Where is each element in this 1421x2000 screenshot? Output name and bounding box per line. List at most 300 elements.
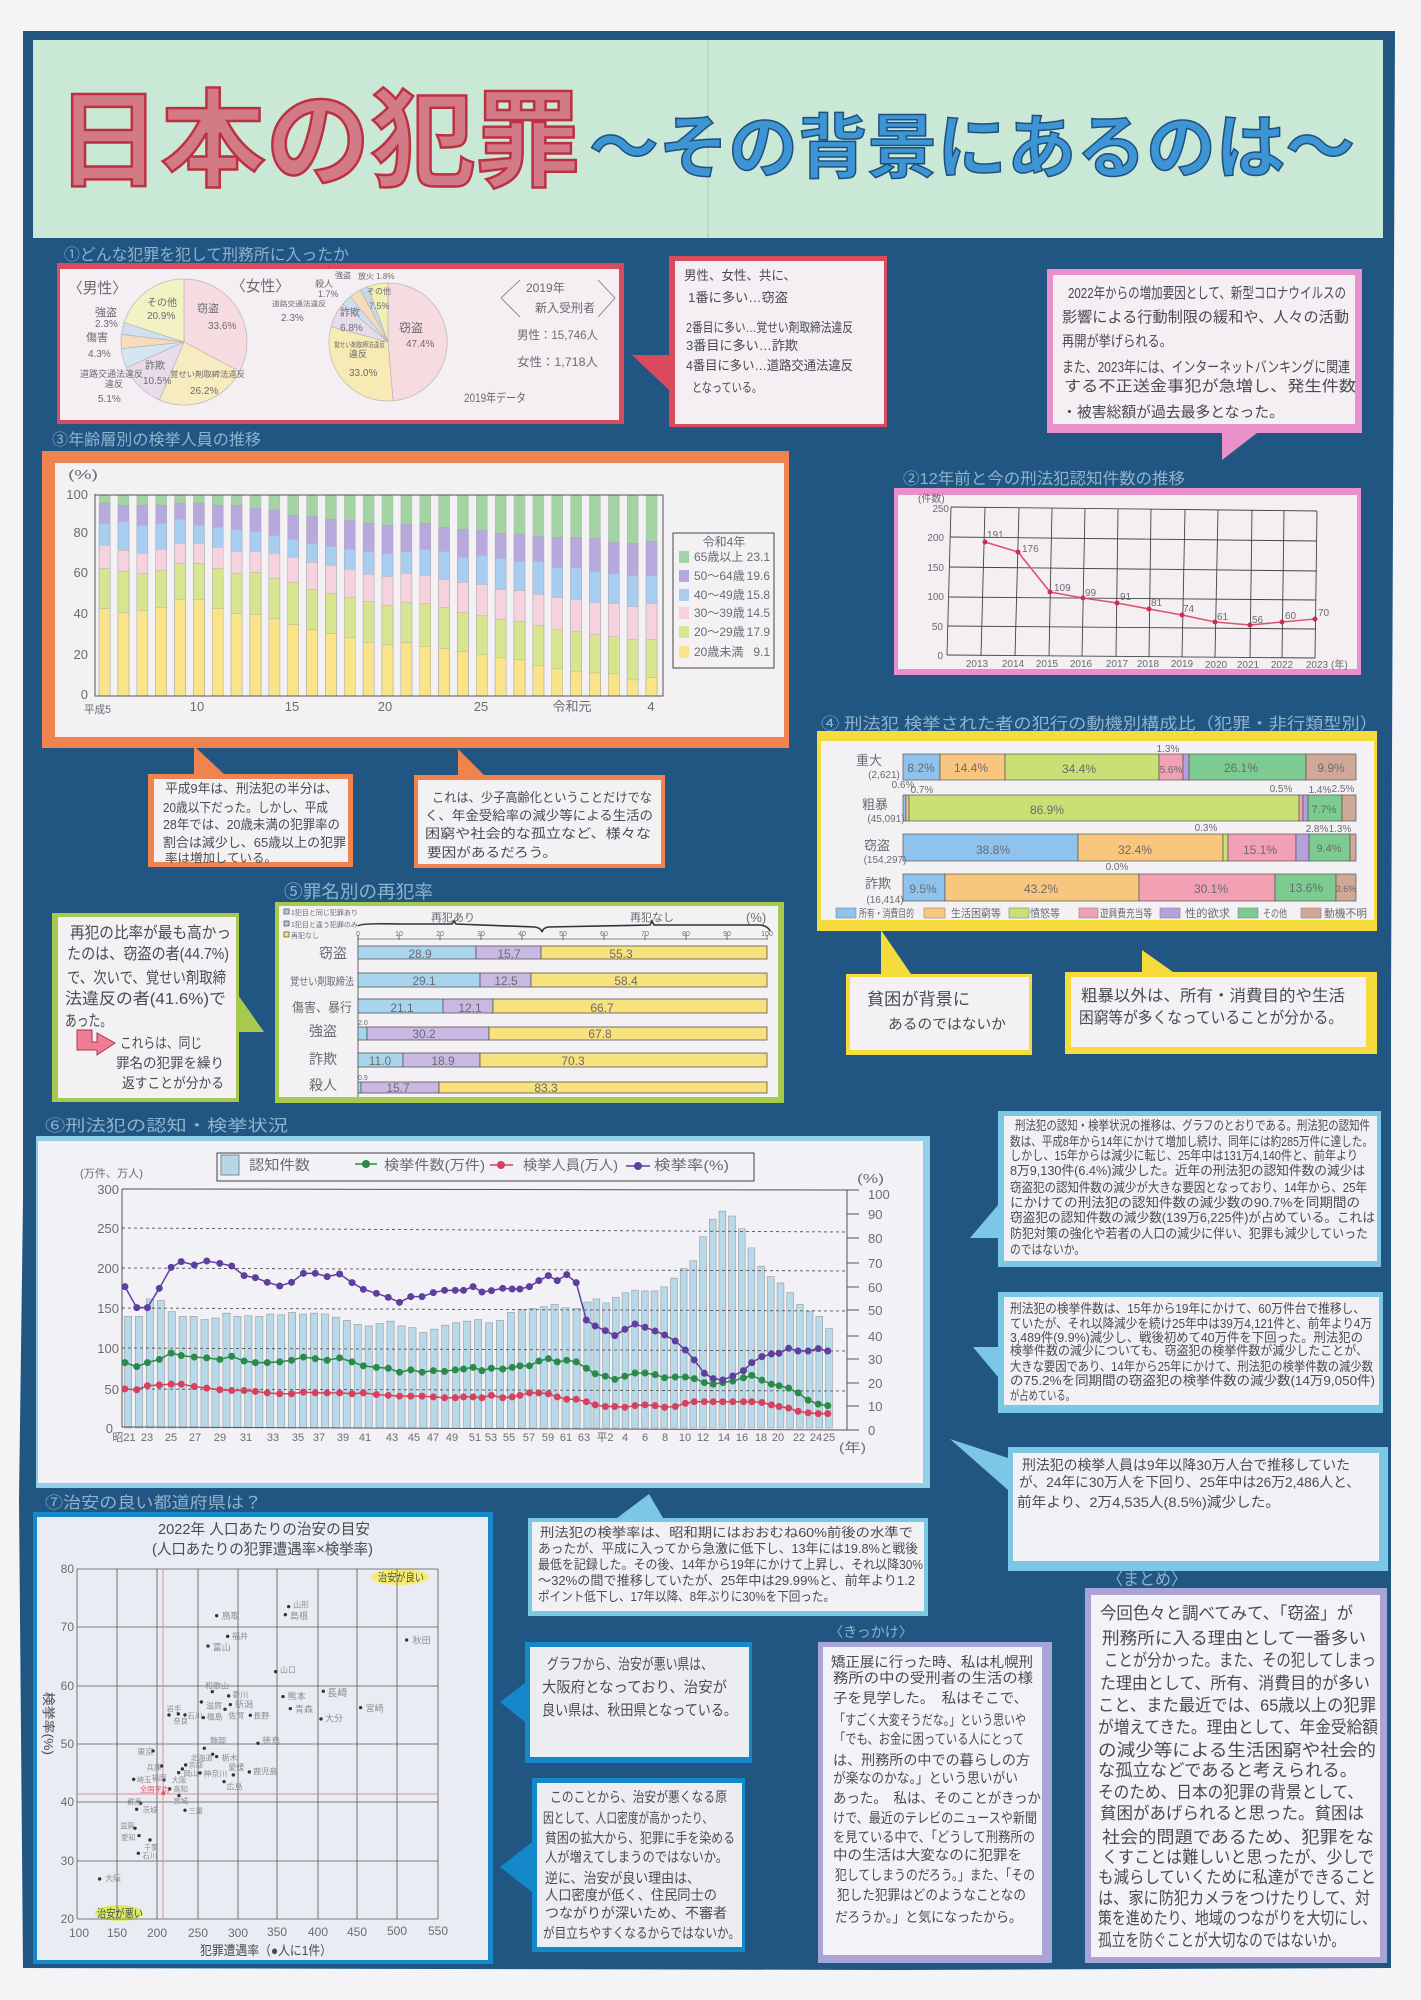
pie labels: 26.2% — [190, 386, 218, 397]
callout: 20s share: 28年では、20歳未満の犯罪率の — [163, 817, 340, 832]
axis labels: 80 — [868, 1231, 882, 1246]
panel: motivation — [818, 1624, 1052, 1963]
heading 2: ②12年前と今の刑法犯認知件数の推移 — [903, 470, 1185, 488]
heading 6: ⑥刑法犯の認知・検挙状況 — [45, 1117, 288, 1135]
inmate numbers — [464, 280, 615, 405]
row labels: 粗暴 — [862, 797, 888, 812]
pie labels: 2.3% — [95, 319, 118, 330]
bar value labels: 34.4% — [1062, 762, 1096, 776]
inmate numbers: 2019年データ — [464, 390, 526, 405]
prefecture points: 滋賀 — [120, 1821, 135, 1830]
brace and axis: 0 — [356, 931, 360, 938]
combo chart: 39 — [337, 1432, 349, 1444]
small segment labels: 1.3% — [1157, 744, 1180, 755]
legend: age groups: 40〜49歳 — [694, 588, 745, 602]
note: worst and best prefecture: グラフから、治安が悪い県は、 — [547, 1656, 713, 1673]
legend: motives: 所有・消費目的 — [859, 906, 914, 920]
small segment labels: 1.4% — [1309, 785, 1332, 796]
legend: age groups: 14.5 — [747, 606, 770, 620]
pie labels: 6.8% — [340, 323, 363, 334]
legend: reoffence type: 1犯目と違う犯罪のみ — [291, 920, 358, 929]
prefecture points: 長野 — [253, 1711, 269, 1720]
stacked bar chart: 20 — [378, 699, 392, 714]
combo chart: 24 — [810, 1432, 822, 1444]
line chart: 2021 — [1237, 660, 1260, 671]
heading: kikkake: 〈きっかけ〉 — [829, 1624, 913, 1640]
brace and axis: 80 — [682, 931, 690, 938]
highlight labels — [97, 1570, 424, 1920]
panel: summary: ことが分かった。また、その犯してしまっ — [1104, 1651, 1376, 1670]
bar value labels: 14.4% — [954, 761, 988, 775]
line chart: 56 — [1252, 615, 1264, 626]
brace and axis: 90 — [723, 931, 731, 938]
axis labels: 90 — [868, 1207, 882, 1222]
prefecture points: 兵庫 — [147, 1763, 161, 1772]
bar values: 29.1 — [412, 974, 436, 988]
legend: reoffence type: 再犯なし — [291, 931, 319, 940]
combo chart: 12 — [697, 1432, 709, 1444]
combo chart: 31 — [240, 1432, 252, 1444]
combo chart: 51 — [469, 1432, 481, 1444]
line chart: 0 — [937, 651, 943, 662]
axis labels: 50 — [868, 1303, 882, 1318]
brace and axis: 50 — [559, 931, 567, 938]
axis labels: 70 — [61, 1620, 74, 1634]
stacked bar chart: 40 — [74, 606, 88, 621]
axis labels: 30 — [868, 1352, 882, 1367]
legend: motives — [836, 906, 1367, 920]
y axis title: 検挙率(%) — [41, 1692, 56, 1755]
combo chart: 27 — [189, 1432, 201, 1444]
panel: motivation: 矯正展に行った時、私は札幌刑 — [831, 1654, 1033, 1670]
prefecture points: 鹿児島 — [253, 1766, 277, 1776]
bar value labels: 32.4% — [1118, 843, 1152, 857]
bar values: 70.3 — [561, 1054, 585, 1068]
bar value labels: 9.4% — [1316, 843, 1342, 855]
stacked bar chart — [66, 467, 663, 716]
callout: 2022 increase factors: また、2023年には、インターネットバンキングに関連 — [1062, 359, 1350, 376]
note: recognised cases: 防犯対策の強化や若者の人口の減少に伴い、犯罪も減少していった — [1010, 1226, 1368, 1241]
combo chart: 8 — [662, 1432, 668, 1444]
legend: motives: 憤怒等 — [1030, 906, 1060, 920]
axis labels: 350 — [267, 1925, 287, 1939]
pie labels: 道路交通法違反 — [80, 368, 143, 379]
callout: 2022 increase factors: する不正送金事犯が急増し、発生件数 — [1064, 378, 1356, 395]
prefecture points: 長崎 — [327, 1687, 347, 1700]
bar values: 28.9 — [408, 947, 432, 961]
brace and axis: 40 — [518, 931, 526, 938]
panel: summary — [1085, 1570, 1387, 1963]
note: recognised cases: しかし、15年からは減少に転じ、25年中は131万4,140件と、前年より — [1010, 1148, 1358, 1163]
panel: summary: な孤立などであると考えられる。 — [1098, 1761, 1357, 1780]
callout: ageing background — [414, 749, 665, 868]
callout: except violent crime — [1065, 950, 1377, 1054]
prefecture points: 山口 — [280, 1666, 296, 1675]
line chart: 60 — [1285, 611, 1297, 622]
combo chart: 45 — [408, 1432, 420, 1444]
panel: motivation: あった。 私は、そのことがきっか — [833, 1790, 1041, 1806]
row labels: 覚せい剤取締法 — [290, 974, 354, 988]
note: cleared cases: 検挙件数の減少についても、窃盗犯の検挙件数が減少したことが、 — [1010, 1343, 1368, 1358]
prefecture points: 熊本 — [288, 1690, 306, 1701]
note: reasons for safety: 人口密度が低く、住民同士の — [545, 1887, 717, 1903]
highlight labels: 治安が良い — [378, 1570, 424, 1584]
row labels: 強盗 — [309, 1023, 337, 1039]
note: reasons for safety: が目立ちやすくなるからではないか。 — [543, 1925, 740, 1941]
callout: except violent crime: 粗暴以外は、所有・消費目的や生活 — [1081, 987, 1345, 1005]
callout: 20s share — [148, 746, 353, 867]
combo chart: 16 — [736, 1432, 748, 1444]
prefecture points: 福岡 — [152, 1774, 166, 1783]
inmate numbers: 2019年 — [526, 281, 565, 295]
pie labels: 33.0% — [349, 368, 377, 379]
axis labels: 10 — [868, 1399, 882, 1414]
bar values: 11.0 — [369, 1054, 392, 1068]
prefecture points: 高知 — [173, 1785, 188, 1794]
axis labels: 40 — [61, 1795, 74, 1809]
note: recognised cases: にかけての刑法犯の認知件数の減少数の90.7%を同期間の — [1010, 1195, 1360, 1210]
axis labels: 20 — [61, 1912, 74, 1926]
pie labels: 47.4% — [406, 339, 434, 350]
callout: 20s share: 20歳以下だった。しかし、平成 — [163, 800, 328, 815]
row labels: 窃盗 — [864, 838, 890, 853]
axis labels: 0 — [106, 1421, 113, 1436]
panel 7: public safety scatter plot — [33, 1494, 493, 1964]
note: cleared cases: が占めている。 — [1010, 1388, 1075, 1403]
pie labels: 〈男性〉 — [68, 280, 127, 297]
pie labels: 殺人 — [315, 278, 333, 289]
line chart: 2015 — [1036, 659, 1059, 670]
prefecture points: 広島 — [227, 1781, 243, 1791]
note: worst and best prefecture: 大阪府となっており、治安が — [542, 1679, 727, 1696]
small segment labels: 0.3% — [1195, 823, 1218, 834]
prefecture points: 徳島 — [262, 1735, 280, 1746]
panel 4: motives stacked bars — [817, 715, 1378, 931]
note: arrested persons — [950, 1439, 1388, 1571]
line chart: 81 — [1151, 598, 1163, 609]
bar value labels: 26.1% — [1224, 761, 1258, 775]
panel: summary: 今回色々と調べてみて、「窃盗」が — [1100, 1604, 1353, 1623]
axis labels: 300 — [228, 1926, 248, 1940]
bar value labels — [907, 761, 1356, 896]
pie labels — [68, 270, 434, 405]
prefecture points: 宮城 — [173, 1796, 189, 1805]
line chart: 2016 — [1070, 659, 1093, 670]
callout: repeat offending note: で、次いで、覚せい剤取締 — [67, 969, 226, 987]
callout: repeat offending note: たのは、窃盗の者(44.7%) — [67, 945, 229, 963]
axis labels — [80, 1167, 890, 1455]
callout: ageing background: 困窮や社会的な孤立など、様々な — [425, 826, 651, 841]
brace and axis: 60 — [600, 931, 608, 938]
legend: reoffence type: 1犯目と同じ犯罪あり — [291, 908, 358, 917]
pie labels: 詐欺 — [145, 359, 165, 372]
bar value labels: 15.1% — [1243, 843, 1277, 857]
bar values: 83.3 — [534, 1081, 558, 1095]
bar values: 58.4 — [614, 974, 638, 988]
legend: age groups: 9.1 — [753, 645, 770, 659]
axis labels: 200 — [97, 1261, 119, 1276]
combo chart: 47 — [427, 1432, 439, 1444]
note: cleared cases — [973, 1292, 1383, 1413]
prefecture points: 愛媛 — [228, 1762, 244, 1772]
combo chart: 14 — [718, 1432, 730, 1444]
row labels: 重大 — [856, 753, 882, 768]
prefecture points: 鳥取 — [222, 1610, 240, 1621]
callout: top crimes: 4番目に多い…道路交通法違反 — [686, 358, 853, 373]
combo chart: 53 — [485, 1432, 497, 1444]
prefecture points: 神奈川 — [203, 1769, 227, 1779]
stacked bar chart: 平成5 — [84, 703, 111, 716]
axis labels: (%) — [857, 1171, 884, 1186]
axis labels: 70 — [868, 1256, 882, 1271]
panel: summary: くすことは難しいと思ったが、少しで — [1102, 1848, 1374, 1867]
legend: age groups: 50〜64歳 — [694, 569, 745, 583]
panel 2: recognised cases line chart — [894, 470, 1361, 675]
bar values: 66.7 — [590, 1001, 614, 1015]
pie labels: その他 — [147, 296, 177, 309]
note: clearance rate — [528, 1494, 928, 1616]
row labels: (2,621) — [868, 770, 900, 781]
line: arrested cases — [125, 1353, 828, 1414]
callout: repeat offending note: 罪名の犯罪を繰り — [116, 1055, 224, 1071]
combo chart: 35 — [292, 1432, 304, 1444]
axis labels: 100 — [97, 1341, 119, 1356]
panel 5: reoffending rate by offence — [275, 882, 784, 1103]
note: clearance rate: 刑法犯の検挙率は、昭和期にはおおむね60%前後の水準で — [540, 1525, 913, 1540]
stacked bar chart: 15 — [285, 699, 299, 714]
prefecture points: 和歌山 — [205, 1681, 229, 1691]
pie labels: 〈女性〉 — [231, 278, 290, 295]
brace and axis: 再犯なし — [630, 911, 674, 924]
line chart: 2018 — [1137, 659, 1160, 670]
icon: pink arrow — [77, 1030, 115, 1055]
bar value labels: 5.6% — [1160, 765, 1183, 776]
line chart: 61 — [1217, 612, 1229, 623]
axis labels: 150 — [107, 1926, 127, 1940]
prefecture points: 滋賀 — [206, 1700, 222, 1710]
row: fraud — [903, 874, 1356, 901]
legend: age groups — [673, 533, 774, 668]
bar value labels: 3.6% — [1336, 884, 1356, 894]
legend: age groups: 令和4年 — [703, 535, 745, 549]
panel: motivation: 「でも、お金に困っている人にとって — [834, 1731, 1024, 1747]
bar values: 12.1 — [458, 1001, 482, 1015]
note: reasons for safety: 貧困の拡大から、犯罪に手を染める — [545, 1830, 735, 1846]
legend: series — [217, 1153, 754, 1181]
panel: motivation: は、刑務所の中での暮らしの方 — [833, 1752, 1030, 1768]
line chart: 100 — [927, 592, 944, 603]
panel 1: pie charts by offence — [57, 246, 624, 424]
legend: age groups: 20〜29歳 — [694, 625, 745, 639]
callout: repeat offending note: これらは、同じ — [120, 1035, 202, 1051]
axis labels: (年) — [839, 1440, 866, 1455]
legend: age groups: 20歳未満 — [694, 645, 743, 659]
x axis title: 犯罪遭遇率（●人に1件） — [200, 1943, 332, 1958]
bar values: 18.9 — [431, 1054, 455, 1068]
chart title — [152, 1521, 373, 1558]
note: clearance rate: あったが、平成に入ってから急激に低下し、13年には19.8%と戦後 — [538, 1541, 918, 1556]
axis labels: 60 — [868, 1280, 882, 1295]
note: reasons for safety: 逆に、治安が良い理由は、 — [545, 1870, 700, 1886]
inmate numbers: 男性：15,746人 — [517, 328, 598, 342]
pie labels: 窃盗 — [197, 301, 219, 315]
prefecture points: 島根 — [290, 1610, 308, 1621]
prefecture points: 岡山 — [183, 1769, 198, 1778]
callout: ageing background: 要因があるだろう。 — [427, 845, 557, 860]
prefecture points: 静岡 — [210, 1735, 226, 1745]
line chart: 150 — [927, 563, 944, 574]
prefecture points: 大分 — [325, 1713, 343, 1724]
prefecture points: 青森 — [295, 1703, 313, 1714]
row labels: 殺人 — [309, 1077, 337, 1093]
combo chart: 25 — [823, 1432, 835, 1444]
callout: repeat offending note: 返すことが分かる — [122, 1075, 224, 1091]
pie labels: 強盗 — [335, 270, 351, 280]
legend: motives: 遊興費充当等 — [1100, 906, 1152, 920]
line: clearance rate — [125, 1261, 828, 1380]
axis labels: 80 — [61, 1562, 74, 1576]
axis labels: (万件、万人) — [80, 1167, 143, 1180]
axis labels: 0 — [868, 1423, 875, 1438]
callout: repeat offending note: 法違反の者(41.6%)で — [65, 990, 226, 1008]
axis labels: 100 — [69, 1926, 89, 1940]
combo chart: 平2 — [596, 1432, 614, 1444]
callout: 2022 increase factors — [1047, 269, 1362, 460]
note: reasons for safety — [500, 1778, 745, 1952]
legend: series: 検挙件数(万件) — [384, 1157, 485, 1173]
note: cleared cases: の75.2%を同期間の窃盗犯の検挙件数の減少数(14万9,050件) — [1010, 1373, 1375, 1388]
panel: motivation: 中の生活は大変なのに犯罪を — [833, 1847, 1022, 1863]
brace and axis — [356, 910, 773, 1097]
prefecture points: 群馬 — [127, 1797, 142, 1806]
panel 6: recognised cases and arrests chart — [36, 1117, 930, 1488]
brace and axis: 30 — [477, 931, 485, 938]
brace and axis: (%) — [746, 910, 766, 925]
bar values: 55.3 — [609, 947, 633, 961]
small segment labels: 2.5% — [1332, 784, 1355, 795]
note: cleared cases: 刑法犯の検挙件数は、15年から19年にかけて、60万件台で推移し、 — [1010, 1301, 1365, 1316]
bar value labels: 9.5% — [909, 882, 937, 896]
stacked bar chart: (%) — [68, 467, 98, 482]
note: recognised cases: 8万9,130件(6.4%)減少した。近年の刑法犯の認知件数の減少は — [1010, 1163, 1365, 1178]
callout: 2022 increase factors: ・被害総額が過去最多となった。 — [1062, 403, 1284, 421]
prefecture points: 大阪 — [172, 1776, 187, 1785]
note: clearance rate: 〜32%の間で推移していたが、25年中は29.99%と、前年より1.2 — [538, 1573, 915, 1588]
row labels: 傷害、暴行 — [292, 1000, 352, 1015]
axis labels: 40 — [868, 1329, 882, 1344]
prefecture points — [100, 1601, 431, 1883]
legend: age groups: 23.1 — [747, 550, 770, 564]
note: cleared cases: 3,489件(9.9%)減少し、戦後初めて40万件を下回った。刑法犯の — [1010, 1330, 1363, 1345]
callout: top crimes — [632, 256, 887, 427]
line chart: 2013 — [966, 659, 989, 670]
line chart: 2023 — [1306, 660, 1329, 671]
chart title: 2022年 人口あたりの治安の目安 — [158, 1521, 370, 1538]
bar value labels: 13.6% — [1289, 881, 1323, 895]
stacked bar chart: 60 — [74, 565, 88, 580]
panel: motivation: が楽なのかな。」という思いがい — [833, 1770, 1018, 1786]
line chart: 250 — [932, 504, 949, 515]
line chart: 70 — [1318, 608, 1330, 619]
prefecture points: 全国平均 — [140, 1785, 169, 1794]
panel: motivation: 「すごく大変そうだな。」という思いや — [834, 1712, 1026, 1728]
heading 4: ④ 刑法犯 検挙された者の犯行の動機別構成比（犯罪・非行類型別） — [821, 715, 1378, 733]
pie labels: 覚せい剤取締法違反 — [334, 340, 385, 349]
line chart: 2022 — [1271, 660, 1294, 671]
note: clearance rate: 最低を記録した。その後、14年から19年にかけて上昇し、それ以降30% — [538, 1557, 923, 1572]
brace and axis: 10 — [395, 931, 403, 938]
combo chart: 37 — [313, 1432, 325, 1444]
highlight ellipses — [371, 1569, 429, 1585]
legend: series: 検挙人員(万人) — [523, 1157, 618, 1173]
small segment labels: 1.3% — [1329, 824, 1352, 835]
stacked bar chart: 10 — [190, 699, 204, 714]
axis labels: 250 — [97, 1221, 119, 1236]
brace and axis: 70 — [641, 931, 649, 938]
line chart: 2020 — [1205, 660, 1228, 671]
callout: repeat offending note: 再犯の比率が最も高かっ — [70, 924, 231, 942]
prefecture points: 岩手 — [167, 1705, 181, 1714]
combo chart: 55 — [503, 1432, 515, 1444]
row labels: (154,297) — [864, 855, 906, 866]
callout: except violent crime: 困窮等が多くなっていることが分かる。 — [1079, 1009, 1343, 1027]
combo chart: 41 — [359, 1432, 371, 1444]
legend: age groups: 30〜39歳 — [694, 606, 745, 620]
note: arrested persons: 前年より、2万4,535人(8.5%)減少した。 — [1017, 1494, 1280, 1510]
note: cleared cases: ていたが、それ以降減少を続け25年中は39万4,121件と、前年より4万 — [1010, 1316, 1372, 1331]
row labels: 詐欺 — [865, 876, 891, 891]
combo chart: 59 — [542, 1432, 554, 1444]
note: reasons for safety: このことから、治安が悪くなる原 — [550, 1789, 727, 1805]
combo chart: 23 — [141, 1432, 153, 1444]
callout: 20s share: 割合は減少し、65歳以上の犯罪 — [163, 835, 346, 850]
combo chart: 18 — [755, 1432, 767, 1444]
bar value labels: 38.8% — [976, 843, 1010, 857]
bar value labels: 30.1% — [1194, 882, 1228, 896]
axis labels: 250 — [188, 1926, 208, 1940]
small segment labels: 0.6% — [892, 780, 915, 791]
brace and axis: 再犯あり — [431, 911, 475, 924]
axis labels — [61, 1562, 448, 1940]
row labels — [290, 945, 354, 1093]
heading 3: ③年齢層別の検挙人員の推移 — [52, 431, 261, 449]
chart title: (人口あたりの犯罪遭遇率×検挙率) — [152, 1541, 373, 1558]
callout: 20s share: 平成9年は、刑法犯の半分は、 — [165, 781, 338, 796]
row: violent — [903, 795, 1356, 821]
row labels: 窃盗 — [319, 945, 347, 961]
bar values: 0.9 — [358, 1075, 368, 1082]
heading 1: ①どんな犯罪を犯して刑務所に入ったか — [64, 246, 349, 264]
panel: summary: 刑務所に入る理由として一番多い — [1102, 1629, 1366, 1648]
pie labels: 詐欺 — [340, 306, 360, 319]
axis labels: 20 — [868, 1376, 882, 1391]
row: serious — [903, 754, 1356, 780]
axis labels: 30 — [61, 1854, 74, 1868]
pie labels: 33.6% — [208, 321, 236, 332]
callout: ageing background: く、年金受給率の減少等による生活の — [425, 808, 653, 823]
bar value labels: 9.9% — [1317, 761, 1345, 775]
brace and axis: 20 — [436, 931, 444, 938]
prefecture points: 愛知 — [121, 1833, 136, 1842]
pie labels: 道路交通法違反 — [272, 299, 326, 308]
legend: motives: 動機不明 — [1324, 906, 1367, 920]
pie labels: その他 — [367, 286, 391, 296]
panel: summary: こと、また最近では、65歳以上の犯罪 — [1098, 1696, 1376, 1715]
combo chart: 20 — [772, 1432, 784, 1444]
combo chart — [80, 1167, 890, 1455]
axis labels: 200 — [147, 1926, 167, 1940]
axis labels: 60 — [61, 1679, 74, 1693]
